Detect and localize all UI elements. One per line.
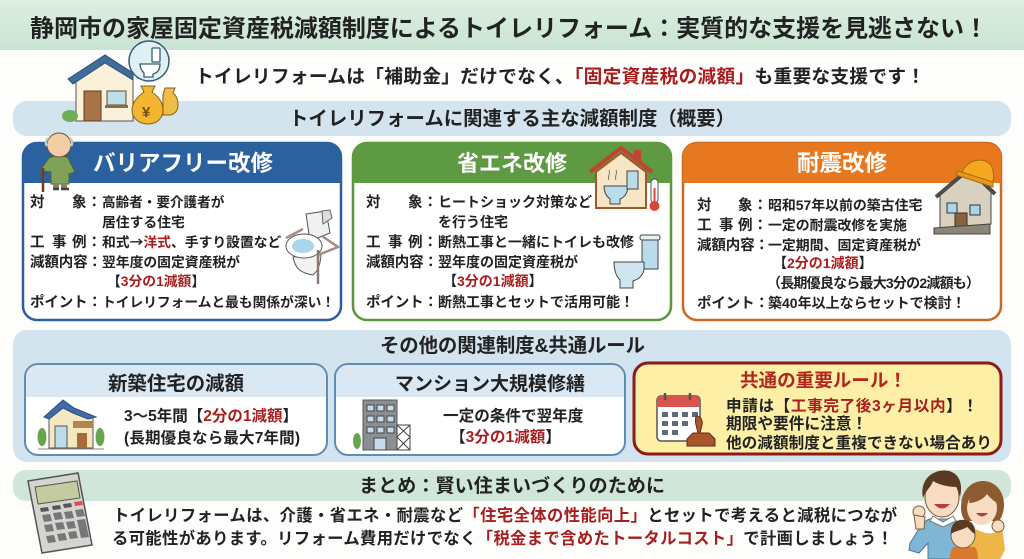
heading: condominium: マンション大規模修繕 (395, 373, 585, 395)
text block: common rule: 他の減額制度と重複できない場合あり (726, 433, 992, 452)
text block: seismic details: 【2分の1減額】 (773, 255, 873, 271)
text block: summary body: トイレリフォームは、介護・省エネ・耐震など「住宅全体の性能向上」とセットで考えると減税につなが (113, 506, 897, 525)
text block: barrier-free details (30, 193, 335, 311)
text block: seismic details: ポイント： (697, 295, 769, 312)
text block: energy saving details: ポイント： (366, 294, 438, 311)
text block: seismic details: 築40年以上ならセットで検討！ (768, 295, 966, 311)
text block: barrier-free details: 高齢者・要介護者が (102, 194, 225, 210)
panel: summary band (13, 470, 1011, 501)
icon: elderly person with cane (41, 133, 75, 192)
text block: barrier-free details: 工事例： (30, 233, 102, 251)
heading: energy saving: 省エネ改修 (457, 151, 567, 176)
text block: seismic details: 一定期間、固定資産税が (768, 237, 921, 253)
text block: condominium: 一定の条件で翌年度 (443, 406, 584, 425)
panel: other systems and common rules (13, 330, 1011, 462)
panel: energy saving (353, 143, 671, 320)
icon: house with toilet bubble and money bags: ¥ (142, 104, 151, 121)
title banner: 静岡市の家屋固定資産税減額制度によるトイレリフォーム：実質的な支援を見逃さない！ (30, 16, 988, 42)
sub-panel: condominium (335, 364, 625, 455)
sub-panel: new house (25, 364, 327, 455)
lead sentence: トイレリフォームは「補助金」だけでなく、「固定資産税の減額」も重要な支援です！ (195, 66, 925, 87)
text block: barrier-free details: 対象： (30, 193, 102, 211)
panel: seismic (683, 143, 1001, 320)
text block: summary body (112, 506, 897, 548)
text block: energy saving details: を行う住宅 (438, 214, 508, 230)
text block: energy saving details: 【3分の1減額】 (443, 273, 543, 289)
text block: seismic details (697, 196, 980, 312)
icon: warm house with thermometer (590, 148, 660, 211)
icon: building with scaffold (353, 400, 410, 450)
icon: new house (38, 400, 104, 449)
panel: barrier-free (23, 133, 341, 320)
text block: seismic details: 工事例： (697, 216, 768, 234)
heading: seismic: 耐震改修 (797, 151, 887, 176)
text block: energy saving details: 対象： (366, 193, 438, 211)
band: overview heading: トイレリフォームに関連する主な減額制度（概要） (289, 107, 735, 130)
heading: new house: 新築住宅の減額 (108, 372, 245, 395)
text block: summary body: る可能性があります。リフォーム費用だけでなく「税金まで含めたトータルコスト」で計画しましょう！ (112, 529, 893, 548)
text block: common rule: 期限や要件に注意！ (726, 415, 867, 433)
text block: seismic details: 対象： (697, 196, 768, 214)
title banner (0, 0, 1024, 50)
text block: energy saving details: 断熱工事と一緒にトイレも改修 (438, 234, 634, 250)
icon: calendar and stamp (657, 393, 715, 446)
text block: barrier-free details: トイレリフォームと最も関係が深い！ (102, 294, 335, 310)
text block: barrier-free details: 居住する住宅 (102, 214, 185, 230)
text block: energy saving details: 工事例： (366, 233, 438, 251)
heading: barrier-free: バリアフリー改修 (93, 151, 273, 176)
icon: toilet with handrails (286, 210, 338, 284)
text block: seismic details: （長期優良なら最大3分の2減額も） (767, 275, 980, 291)
text block: barrier-free details: 【3分の1減額】 (107, 273, 205, 289)
heading: summary: まとめ：賢い住まいづくりのために (359, 475, 665, 497)
heading: other systems: その他の関連制度&共通ルール (380, 335, 645, 357)
icon: quake house and helmet (934, 160, 995, 234)
text block: energy saving details: 断熱工事とセットで活用可能！ (438, 294, 634, 310)
text block: seismic details: 昭和57年以前の築古住宅 (768, 197, 922, 213)
text block: energy saving details: 翌年度の固定資産税が (438, 254, 578, 270)
text block: condominium: 【3分の1減額】 (450, 428, 561, 446)
text block: barrier-free details: 和式→洋式、手すり設置など (102, 231, 282, 251)
text block: common rule (726, 396, 992, 452)
text block: new house: 3～5年間【2分の1減額】 (124, 406, 298, 425)
text block: barrier-free details: 減額内容： (30, 253, 102, 271)
text block: condominium (443, 406, 584, 446)
icon: toilet (614, 235, 660, 288)
text block: energy saving details: ヒートショック対策など (438, 194, 592, 210)
band: overview heading (13, 101, 1011, 136)
text block: energy saving details (366, 193, 634, 311)
callout: common important rule (634, 363, 1001, 454)
text block: new house: (長期優良なら最大7年間) (124, 428, 300, 447)
text block: seismic details: 減額内容： (697, 236, 769, 254)
text block: new house (124, 406, 300, 447)
text block: barrier-free details: 翌年度の固定資産税が (102, 254, 240, 270)
text block: common rule: 申請は【工事完了後3ヶ月以内】！ (726, 396, 978, 415)
icon: family (909, 470, 1005, 559)
text block: energy saving details: 減額内容： (366, 253, 438, 271)
icon: house with toilet bubble and money bags (62, 41, 178, 124)
heading: common rule: 共通の重要ルール！ (740, 370, 907, 391)
icon: calculator (28, 473, 92, 553)
text block: barrier-free details: ポイント： (30, 294, 102, 311)
text block: seismic details: 一定の耐震改修を実施 (768, 217, 907, 233)
